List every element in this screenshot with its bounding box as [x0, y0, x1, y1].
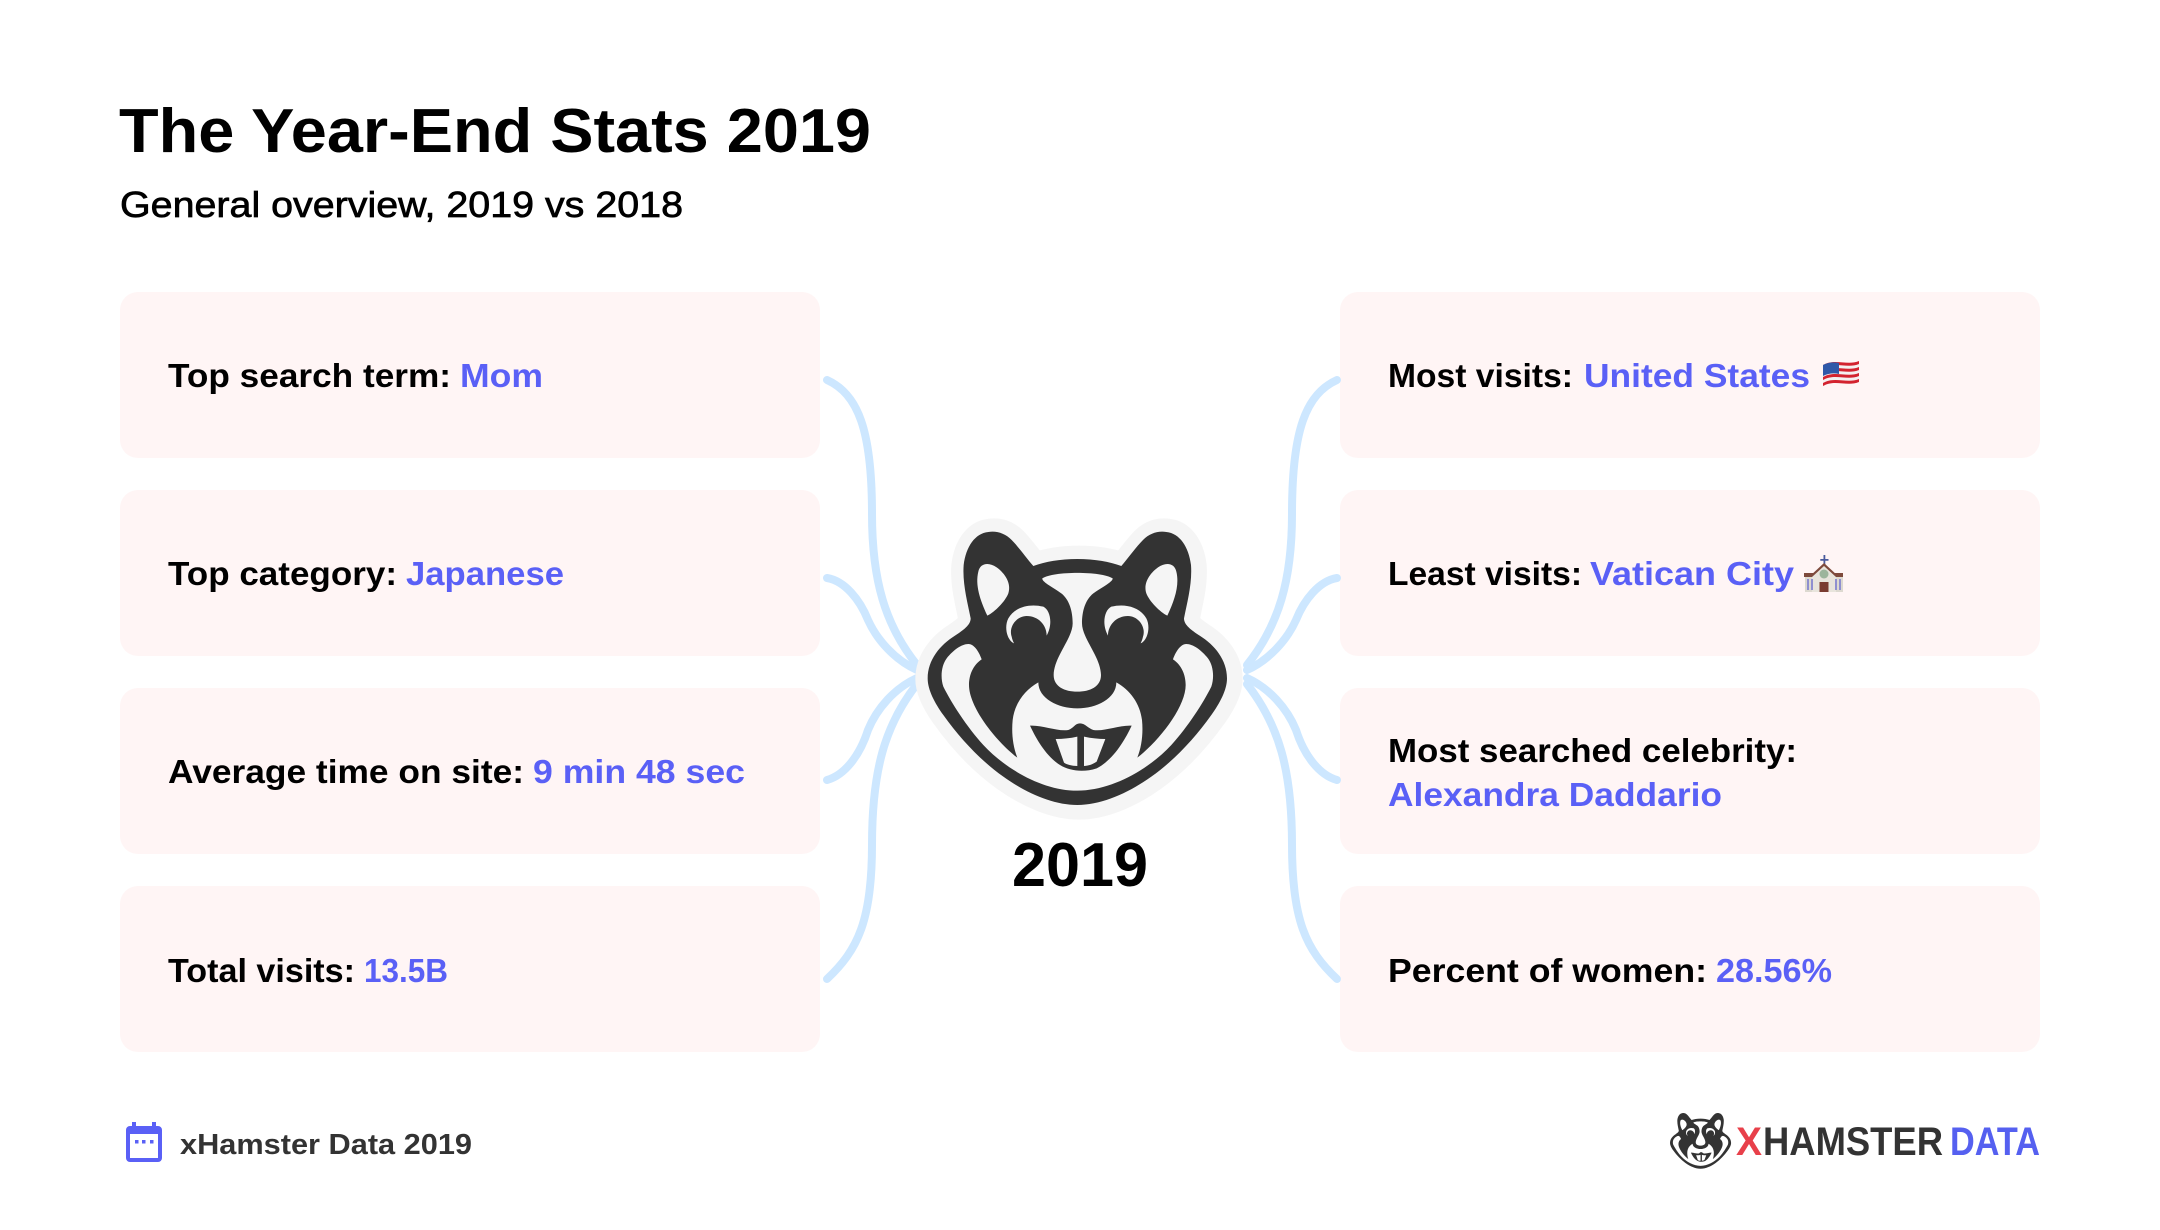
title: The Year-End Stats 2019 — [119, 97, 871, 166]
panel: top category — [120, 490, 820, 656]
label: most visits: Most visits: — [1388, 357, 1573, 394]
icon: calendar — [126, 1122, 162, 1162]
panel: average time on site — [120, 688, 820, 854]
panel: most searched celebrity — [1340, 688, 2040, 854]
panel: total visits — [120, 886, 820, 1052]
label: percent of women: Percent of women: — [1388, 952, 1707, 989]
panel: top search term — [120, 292, 820, 458]
label: most searched celebrity: Most searched celebrity: — [1388, 732, 1797, 769]
label: average time on site: Average time on site: — [168, 753, 524, 790]
label: total visits: Total visits: — [168, 952, 355, 989]
icon: central hamster mascot — [928, 532, 1229, 806]
panel: most visits — [1340, 292, 2040, 458]
logo: xHamster Data — [1670, 1113, 2040, 1169]
logo hamster icon — [1670, 1113, 1731, 1169]
icon: US flag — [1823, 361, 1859, 386]
central year label: 2019 — [1012, 831, 1148, 900]
logo wordmark X: X — [1736, 1120, 1762, 1164]
value: 9 min 48 sec: 9 min 48 sec — [533, 753, 745, 790]
value: Japanese: Japanese — [406, 555, 564, 592]
value: United States: United States — [1584, 357, 1810, 394]
logo wordmark DATA: DATA — [1950, 1120, 2040, 1164]
connector curves: left — [827, 380, 917, 979]
panel: least visits — [1340, 490, 2040, 656]
label: least visits: Least visits: — [1388, 555, 1582, 592]
icon: church — [1804, 555, 1843, 592]
label: top category: Top category: — [168, 555, 397, 592]
connector curves: right — [1247, 380, 1337, 979]
subtitle: General overview, 2019 vs 2018 — [120, 184, 683, 225]
value: 28.56%: 28.56% — [1716, 952, 1832, 989]
value: Alexandra Daddario: Alexandra Daddario — [1388, 776, 1722, 813]
label: top search term: Top search term: — [168, 357, 451, 394]
value: 13.5B: 13.5B — [364, 952, 448, 989]
panel: percent of women — [1340, 886, 2040, 1052]
footer source text: xHamster Data 2019 — [180, 1129, 472, 1161]
value: Vatican City: Vatican City — [1590, 555, 1795, 592]
logo wordmark HAMSTER: HAMSTER — [1763, 1120, 1943, 1164]
value: Mom: Mom — [460, 357, 543, 394]
